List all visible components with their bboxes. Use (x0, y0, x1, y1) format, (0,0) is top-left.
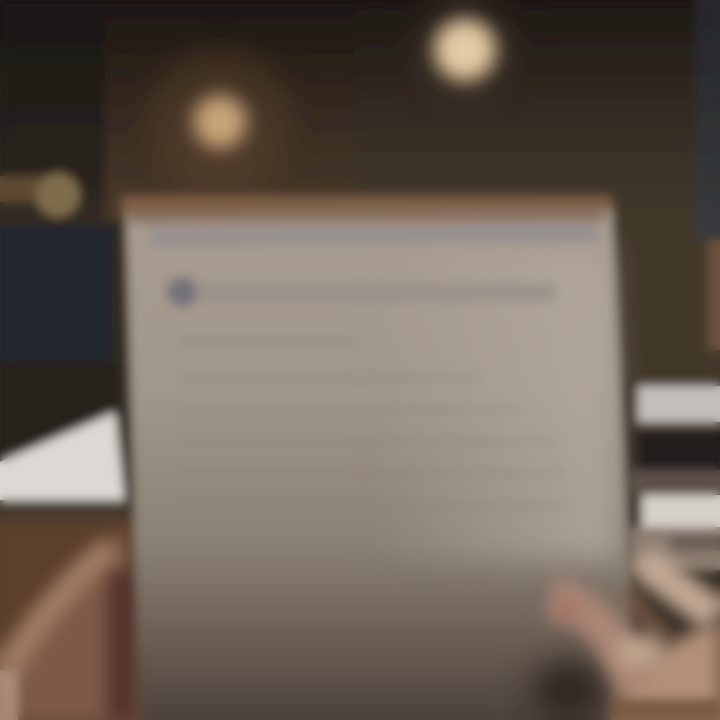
heading mark (167, 277, 197, 307)
light right side of paper (380, 250, 618, 560)
palm lower (612, 698, 720, 720)
header band (150, 224, 598, 246)
dark panel at right edge (695, 0, 720, 240)
white table surface left (0, 412, 125, 504)
index finger (552, 598, 636, 690)
heading line (196, 283, 556, 302)
dark shelf at left (0, 362, 118, 462)
right hand (532, 560, 720, 720)
navy block at left (0, 226, 112, 362)
paper sheet (126, 210, 636, 720)
warm top edge (122, 196, 612, 216)
finger pink tone (549, 596, 581, 624)
wall light left (148, 50, 292, 194)
wooden table left (0, 500, 150, 720)
left hand (0, 528, 140, 720)
wall light right (415, 0, 515, 100)
blurred sign at left (0, 173, 80, 217)
palm (612, 622, 720, 720)
palm highlight (614, 634, 666, 670)
hand shadow on paper (532, 660, 604, 720)
warm glow at right edge (708, 240, 720, 350)
blurred text lines (176, 336, 566, 510)
upper finger (640, 560, 716, 616)
objects at right (632, 380, 720, 570)
document (122, 196, 636, 720)
pink edge (130, 208, 606, 224)
finger shadow (628, 588, 668, 640)
